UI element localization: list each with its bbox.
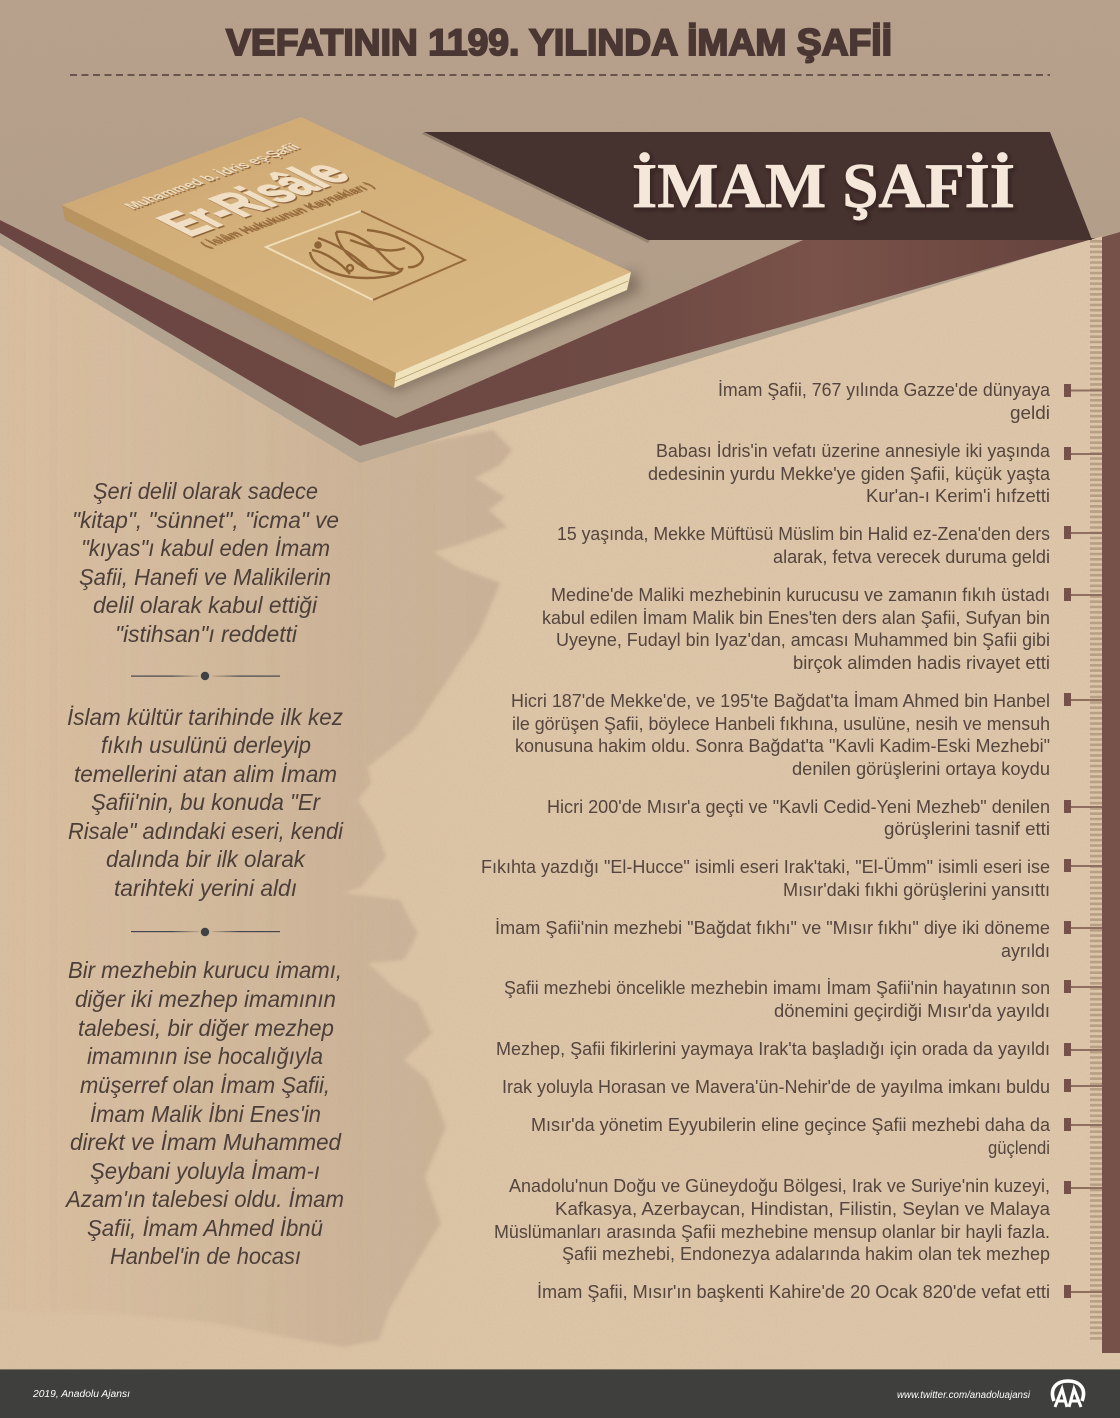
timeline entry 4: Uyeyne, Fudayl bin Iyaz'dan, amcası Muhammed bin Şafii gibi — [556, 630, 1050, 650]
timeline entry 13: Anadolu'nun Doğu ve Güneydoğu Bölgesi, Irak ve Suriye'nin kuzeyi, — [509, 1176, 1050, 1196]
timeline entry 7: Mısır'daki fıkhi görüşlerini yansıttı — [783, 880, 1050, 900]
timeline entry 6 — [547, 797, 1102, 839]
timeline entry 5: denilen görüşlerini ortaya koydu — [792, 759, 1050, 779]
left text block 3: talebesi, bir diğer mezhep — [78, 1015, 334, 1041]
timeline entry 5: ile görüşen Şafii, böylece Hanbeli fıkhına, usulüne, nesih ve mensuh — [512, 714, 1050, 734]
left text block 3: İmam Malik İbni Enes'in — [90, 1101, 321, 1127]
dashed title rule — [70, 74, 1050, 76]
left text block 2: İslam kültür tarihinde ilk kez — [67, 704, 343, 730]
left text block 2: temellerini atan alim İmam — [74, 761, 337, 787]
book cover text: Muhammed b. İdris eş-Şafii — [120, 141, 305, 211]
left text block 1: delil olarak kabul ettiği — [93, 592, 318, 618]
footer credit: 2019, Anadolu Ajansı — [32, 1389, 130, 1400]
timeline entry 1 — [718, 380, 1102, 423]
divider 1 — [131, 672, 280, 680]
timeline entry 14: İmam Şafii, Mısır'ın başkenti Kahire'de 20 Ocak 820'de vefat etti — [537, 1282, 1050, 1302]
timeline entry 9: Şafii mezhebi öncelikle mezhebin imamı İmam Şafii'nin hayatının son — [504, 978, 1050, 998]
timeline entry 6: Hicri 200'de Mısır'a geçti ve "Kavli Cedid-Yeni Mezheb" denilen — [547, 797, 1050, 817]
footer bar — [0, 1369, 1120, 1418]
divider 2 — [131, 928, 280, 936]
timeline entry 1: İmam Şafii, 767 yılında Gazze'de dünyaya — [718, 380, 1051, 400]
timeline entry 2 — [648, 441, 1102, 506]
left text block 3 — [64, 957, 344, 1269]
timeline entry 2: dedesinin yurdu Mekke'ye giden Şafii, küçük yaşta — [648, 464, 1051, 484]
band shadow — [0, 233, 1096, 463]
left text block 3: imamının ise hocalığıyla — [87, 1043, 323, 1069]
ruler — [1096, 232, 1120, 1353]
left text block 3: Şafii, İmam Ahmed İbnü — [87, 1215, 323, 1241]
timeline entry 1: geldi — [1010, 403, 1050, 423]
timeline entry 7 — [481, 857, 1102, 900]
timeline entry 11: Irak yoluyla Horasan ve Mavera'ün-Nehir'de de yayılma imkanı buldu — [502, 1077, 1050, 1097]
timeline entry 7: Fıkıhta yazdığı "El-Hucce" isimli eseri Irak'taki, "El-Ümm" isimli eseri ise — [481, 857, 1050, 877]
left text block 2: tarihteki yerini aldı — [114, 875, 297, 901]
timeline entry 9 — [504, 978, 1102, 1021]
timeline entry 13: Kafkasya, Azerbaycan, Hindistan, Filistin, Seylan ve Malaya — [555, 1199, 1051, 1219]
book pages — [394, 272, 631, 388]
timeline entry 5: Hicri 187'de Mekke'de, ve 195'te Bağdat'ta İmam Ahmed bin Hanbel — [511, 691, 1050, 711]
banner: dark ribbon — [422, 132, 1092, 243]
timeline entry 4: Medine'de Maliki mezhebinin kurucusu ve zamanın fıkıh üstadı — [551, 585, 1050, 605]
timeline entry 12: Mısır'da yönetim Eyyubilerin eline geçince Şafii mezhebi daha da — [531, 1115, 1051, 1135]
left text block 1: "istihsan"ı reddetti — [115, 621, 298, 647]
timeline entry 5: konusuna hakim oldu. Sonra Bağdat'ta "Kavli Kadim-Eski Mezhebi" — [515, 736, 1050, 756]
left text block 2: dalında bir ilk olarak — [106, 846, 306, 872]
left text block 2 — [67, 704, 344, 901]
book emblem frame — [266, 211, 465, 300]
left text block 1: "kıyas"ı kabul eden İmam — [81, 535, 330, 561]
timeline entry 8: İmam Şafii'nin mezhebi "Bağdat fıkhı" ve "Mısır fıkhı" diye iki döneme — [495, 918, 1050, 938]
timeline entry 5 — [511, 691, 1102, 779]
left text block 3: Azam'ın talebesi oldu. İmam — [64, 1186, 344, 1212]
timeline entry 8 — [495, 918, 1102, 961]
timeline entry 3: 15 yaşında, Mekke Müftüsü Müslim bin Halid ez-Zena'den ders — [557, 524, 1050, 544]
timeline entry 9: dönemini geçirdiği Mısır'da yayıldı — [774, 1001, 1050, 1021]
book cover — [62, 117, 631, 373]
book calligraphy emblem — [310, 230, 423, 278]
timeline entry 10: Mezhep, Şafii fikirlerini yaymaya Irak'ta başladığı için orada da yayıldı — [496, 1039, 1050, 1059]
timeline entry 12: güçlendi — [988, 1138, 1050, 1158]
timeline entry 4 — [542, 585, 1102, 673]
left text block 3: Bir mezhebin kurucu imamı, — [68, 957, 342, 983]
timeline entry 6: görüşlerini tasnif etti — [884, 819, 1050, 839]
left text block 3: Hanbel'in de hocası — [110, 1243, 301, 1269]
banner heading: İMAM ŞAFİİ — [632, 151, 1015, 221]
timeline entry 13 — [494, 1176, 1102, 1264]
timeline entry 4: kabul edilen İmam Malik bin Enes'ten ders alan Şafii, Sufyan bin — [542, 608, 1050, 628]
left text block 3: Şeybani yoluyla İmam-ı — [90, 1158, 320, 1184]
timeline entry 13: Şafii mezhebi, Endonezya adalarında hakim olan tek mezhep — [562, 1244, 1050, 1264]
book illustration — [62, 117, 640, 392]
timeline entry 3: alarak, fetva verecek duruma geldi — [773, 547, 1050, 567]
left text block 1: "kitap", "sünnet", "icma" ve — [72, 507, 339, 533]
book spine side — [62, 205, 396, 388]
left text block 3: müşerref olan İmam Şafii, — [80, 1072, 330, 1098]
maroon chevron band — [0, 220, 1096, 446]
top band — [0, 0, 1120, 418]
book cover text: Er-Risâle — [144, 154, 364, 243]
left text block 1 — [72, 478, 339, 647]
left text block 2: fıkıh usulünü derleyip — [101, 732, 311, 758]
timeline entry 12 — [531, 1115, 1102, 1158]
background stain — [0, 240, 512, 1347]
timeline entry 8: ayrıldı — [1001, 941, 1050, 961]
left text block 3: diğer iki mezhep imamının — [75, 986, 336, 1012]
left text block 3: direkt ve İmam Muhammed — [70, 1129, 342, 1155]
timeline entry 2: Kur'an-ı Kerim'i hıfzetti — [866, 486, 1050, 506]
book cover text: ( İslâm Hukukunun Kaynakları ) — [196, 180, 377, 249]
footer link: www.twitter.com/anadoluajansi — [897, 1390, 1031, 1401]
title: VEFATININ 1199. YILINDA İMAM ŞAFİİ — [226, 22, 892, 63]
timeline entry 3 — [557, 524, 1102, 567]
timeline entry 2: Babası İdris'in vefatı üzerine annesiyle iki yaşında — [656, 441, 1051, 461]
timeline entry 4: birçok alimden hadis rivayet etti — [793, 653, 1050, 673]
icon: agency logo — [1052, 1381, 1084, 1407]
left text block 1: Şeri delil olarak sadece — [93, 478, 318, 504]
book cover text — [120, 141, 378, 249]
left text block 1: Şafii, Hanefi ve Malikilerin — [79, 564, 331, 590]
left text block 2: Risale" adındaki eseri, kendi — [68, 818, 344, 844]
left text block 2: Şafii'nin, bu konuda "Er — [91, 789, 321, 815]
timeline entry 13: Müslümanları arasında Şafii mezhebine mensup olanlar bir hayli fazla. — [494, 1222, 1050, 1242]
